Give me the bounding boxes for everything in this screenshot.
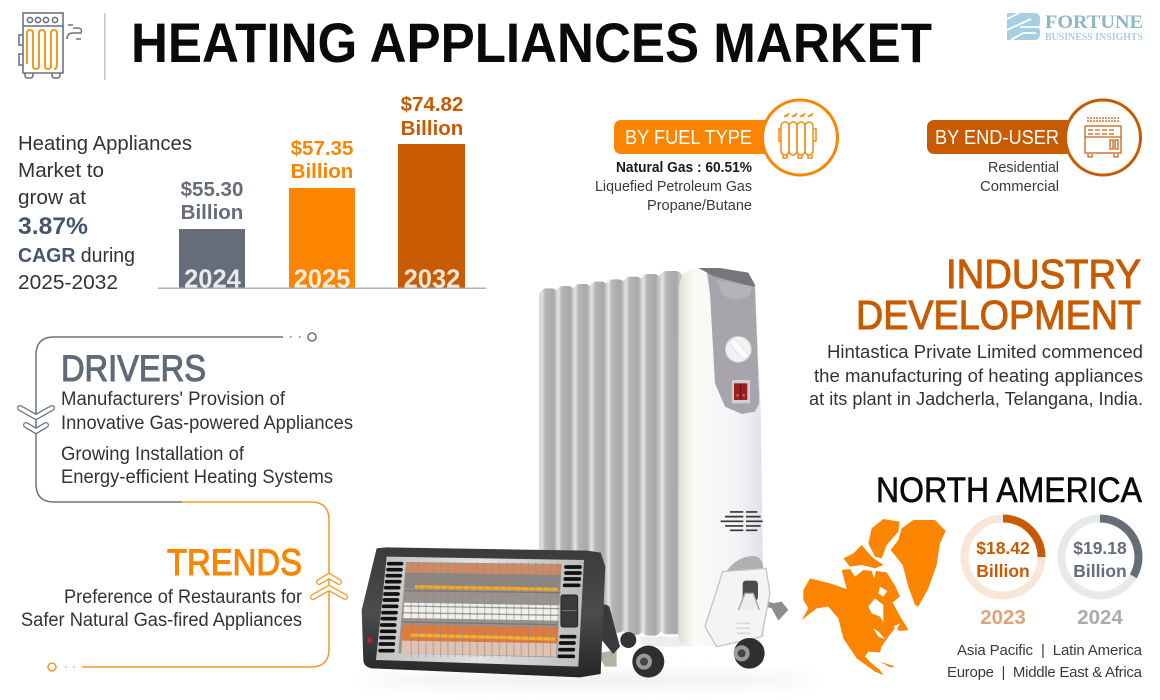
indicator light [367,637,373,643]
control panel [707,270,759,414]
panel: industry development: DEVELOPMENT [856,292,1141,338]
panel: by fuel type: Propane/Butane [647,198,752,214]
donut: 2023: $18.42 [976,538,1030,558]
back wheel [620,632,636,648]
panel: north america: Asia Pacific | Latin America [957,642,1143,659]
panel: by end-user: Residential [988,160,1059,176]
panel: trends: Safer Natural Gas-fired Appliances [21,610,302,631]
CAGR text block: 2025-2032 [18,272,118,294]
icon: wall heater [1085,116,1121,157]
heater switch [561,595,578,627]
heating elements [401,562,562,657]
title: HEATING APPLIANCES MARKET [131,11,932,74]
panel: north america: NORTH AMERICA [876,471,1143,510]
icon: radiator [779,113,816,158]
logo: Fortune Business Insights: BUSINESS INSIGHTS [1045,32,1143,43]
CAGR text block: grow at [18,187,86,209]
donut: 2024 [1062,518,1138,596]
illustration: quartz heater [362,547,620,677]
panel: by end-user: Commercial [980,179,1059,195]
bar chart: $57.35 [291,137,353,160]
floor shadow [360,672,820,688]
panel: by fuel type [595,100,838,214]
panel: north america: 2023 [980,606,1026,629]
power switch [732,380,750,403]
front wheels [632,638,765,678]
bar chart: $55.30 [181,178,243,201]
donut: 2024: Billion [1073,561,1127,581]
header icon: heater [19,13,82,78]
CAGR text block: Market to [18,160,104,182]
panel: trends: Preference of Restaurants for [64,587,303,608]
bar chart [158,93,486,294]
CAGR text block: 3.87% [18,213,88,240]
thermostat knob [725,336,751,362]
logo: Fortune Business Insights: FORTUNE [1045,13,1143,33]
panel: industry development: at its plant in Jadcherla, Telangana, India. [809,389,1143,409]
CAGR text block [18,133,192,294]
panel: industry development [809,251,1143,409]
panel: drivers: Energy-efficient Heating Systems [61,467,333,488]
bar chart: 2025 [294,266,350,294]
panel: north america [802,471,1143,681]
trends connector line with arrow [48,502,345,671]
panel: drivers [20,333,353,502]
bar chart: Billion [291,160,353,183]
drivers connector line with arrow [20,333,316,502]
power cord holder [705,556,788,647]
panel: drivers: Growing Installation of [61,444,245,465]
panel: industry development: Hintastica Private Limited commenced [827,342,1143,362]
panel: north america: Europe | Middle East & Africa [947,664,1143,681]
donut: 2023 [964,518,1042,596]
illustration: oil-filled radiator [539,268,788,678]
logo: Fortune Business Insights [1007,13,1143,43]
panel: by fuel type: BY FUEL TYPE [625,127,752,149]
panel: north america: 2024 [1077,606,1123,629]
bar chart: Billion [181,201,243,224]
donut: 2024: $19.18 [1073,538,1127,558]
panel: drivers: DRIVERS [61,348,206,389]
foot [640,637,683,647]
bar chart: 2024 [184,266,242,294]
left slats [380,564,402,651]
vent slots [721,512,763,530]
bar chart: Billion [401,117,463,140]
header divider [104,13,106,80]
carry handle [698,268,756,287]
heater stand [597,605,620,667]
CAGR text block: CAGR during [18,245,135,267]
panel: trends [21,502,345,671]
right slats [559,567,580,656]
panel: industry development: INDUSTRY [946,251,1141,297]
panel: industry development: the manufacturing of heating appliances [814,366,1143,386]
front panel [678,268,764,647]
panel: by end-user [927,100,1140,195]
CAGR text block: Heating Appliances [18,133,192,155]
bar chart: $74.82 [401,93,463,116]
panel: drivers: Manufacturers' Provision of [61,389,286,410]
panel: by fuel type: Liquefied Petroleum Gas [595,179,752,195]
bar chart: 2032 [404,266,460,294]
donut: 2023: Billion [976,561,1030,581]
panel: by end-user: BY END-USER [935,127,1059,149]
panel: drivers: Innovative Gas-powered Appliances [61,413,353,434]
panel: trends: TRENDS [167,542,302,583]
panel: by fuel type: Natural Gas : 60.51% [616,160,752,176]
map: north america [802,519,946,675]
